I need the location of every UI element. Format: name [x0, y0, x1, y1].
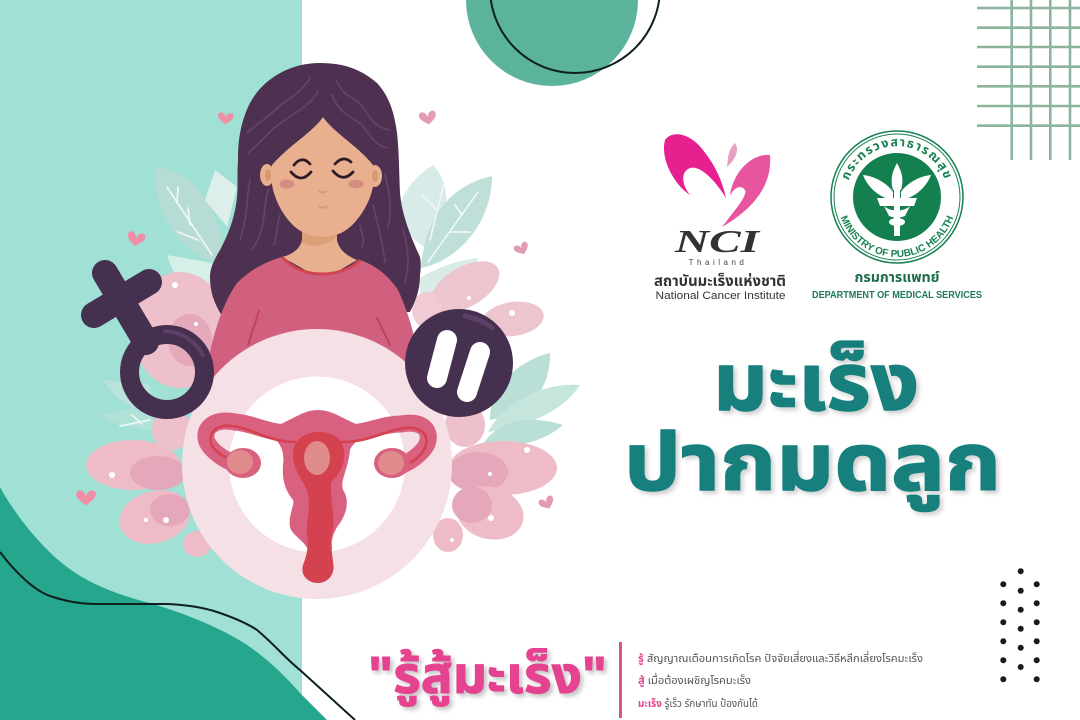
slogan: "รู้สู้มะเร็ง" [368, 647, 607, 707]
uterus body [262, 410, 375, 550]
shirt folds [248, 311, 390, 345]
logo letters: NCI [674, 223, 761, 259]
department name Thai: กรมการแพทย์ [854, 269, 940, 285]
ears [260, 164, 382, 187]
hearts [76, 110, 556, 512]
slogan explanation: รู้ สัญญาณเตือนการเกิดโรค ปัจจัยเสี่ยงและวิธีหลีกเลี่ยงโรคมะเร็ง [638, 650, 923, 665]
uterine inner oval [304, 441, 330, 475]
nose and mouth [319, 191, 327, 208]
title [624, 338, 1001, 511]
dark green corner shape [0, 487, 327, 720]
logo: Ministry of Public Health seal [830, 130, 964, 264]
Thailand: Thailand [689, 258, 747, 267]
large circle [182, 329, 452, 599]
eyes [291, 159, 353, 178]
caduceus emblem [863, 163, 931, 236]
icon: female symbol [94, 273, 204, 410]
top circle [466, 0, 660, 86]
slogan explanation [638, 650, 923, 710]
icon: pills [405, 309, 513, 417]
slogan explanation: สู้ เมื่อต้องเผชิญโรคมะเร็ง [638, 672, 751, 687]
ovaries [225, 448, 410, 478]
illustration: woman with reproductive health symbols [76, 63, 580, 599]
black curve line [0, 552, 355, 720]
logo: National Cancer Institute [654, 134, 786, 302]
cheeks [280, 180, 364, 188]
divider [619, 642, 622, 718]
seal text top: กระทรวงสาธารณสุข [843, 138, 951, 180]
uterine cavity and cervix [293, 432, 344, 583]
collar [282, 257, 360, 274]
pink flowers [86, 251, 557, 557]
dot pattern [1000, 568, 1040, 682]
shirt [210, 257, 420, 420]
neck [282, 225, 357, 280]
uterus [206, 410, 428, 583]
face [271, 117, 374, 237]
heart symbol [664, 134, 770, 227]
Thai institute name: สถาบันมะเร็งแห่งชาติ [654, 272, 786, 290]
department name English: DEPARTMENT OF MEDICAL SERVICES [812, 290, 982, 301]
slogan explanation: มะเร็ง รู้เร็ว รักษาทัน ป้องกันได้ [638, 697, 758, 710]
fallopian tubes [206, 421, 428, 466]
title: มะเร็ง [713, 338, 919, 427]
title: ปากมดลูก [624, 418, 1001, 511]
hair [210, 63, 421, 316]
leaves behind the woman [100, 165, 580, 449]
hair strands [240, 78, 408, 282]
English institute name: National Cancer Institute [656, 290, 786, 302]
seal text bottom: MINISTRY OF PUBLIC HEALTH [840, 215, 954, 257]
tube lines [211, 426, 426, 464]
grid pattern [977, 0, 1080, 160]
neck shadow [302, 228, 337, 246]
